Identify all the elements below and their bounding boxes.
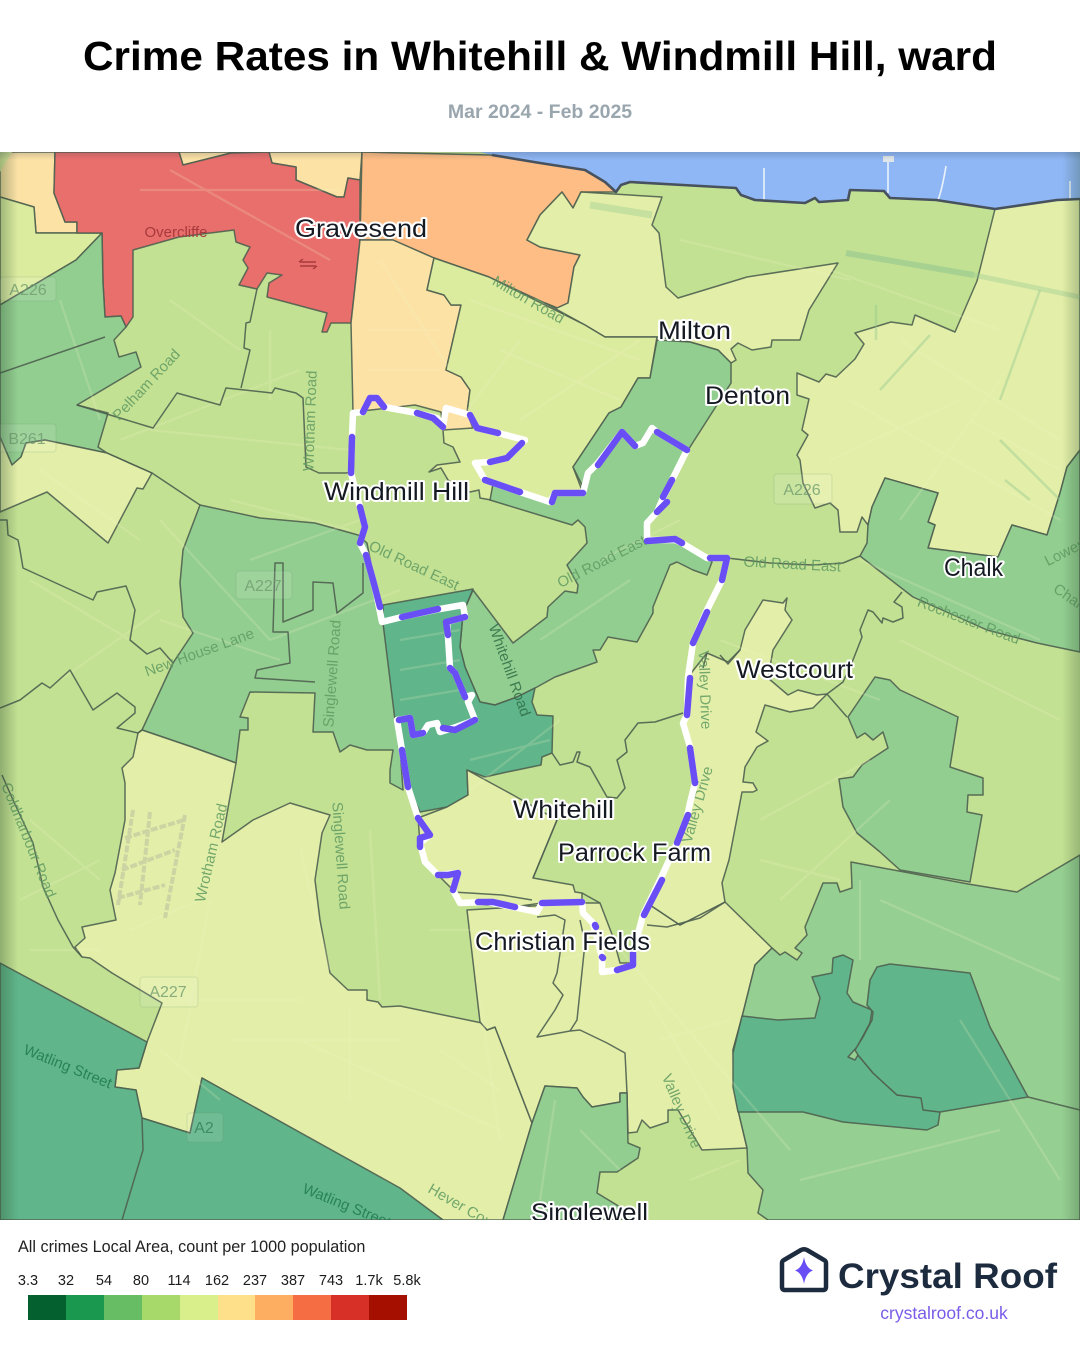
place labels: Singlewell	[531, 1199, 648, 1227]
place labels: Westcourt	[736, 656, 853, 684]
railway and creeks	[590, 205, 1080, 500]
area: west light	[0, 437, 152, 543]
legend tick labels: 32	[58, 1273, 74, 1289]
map base	[0, 152, 1080, 1220]
road labels: Old Road East	[743, 553, 842, 576]
road badges: A226	[783, 482, 821, 499]
road labels: Pelham Road	[109, 346, 184, 424]
water: Thames	[480, 152, 1080, 209]
area: Westcourt light	[650, 598, 827, 925]
legend tick labels: 743	[319, 1273, 343, 1289]
road badges: A227	[149, 984, 187, 1001]
area: south-west light	[75, 730, 532, 1220]
road badges: A227	[244, 578, 282, 595]
logo: Crystal Roof	[780, 1247, 1058, 1323]
legend tick labels: 387	[281, 1273, 305, 1289]
place labels: Christian Fields	[475, 928, 650, 956]
legend tick labels: 114	[167, 1273, 191, 1289]
legend colour scale	[28, 1295, 407, 1320]
area: Old Road East medium green	[460, 340, 731, 705]
legend title: All crimes Local Area, count per 1000 population	[18, 1238, 365, 1256]
choropleth map	[0, 152, 1080, 1220]
coastline	[492, 155, 1080, 209]
road labels: Singlewell Road	[320, 619, 345, 728]
area: corner	[0, 152, 12, 172]
place labels: Windmill Hill	[324, 478, 469, 506]
legend tick labels: 80	[133, 1273, 149, 1289]
road labels: Hever Court	[425, 1181, 504, 1236]
ward boundary: white line	[351, 398, 727, 972]
area: Singlewell medium green	[503, 1086, 640, 1220]
area: south-east medium green	[733, 855, 1080, 1220]
road labels: New House Lane	[142, 625, 256, 680]
road badges: B261	[8, 431, 46, 448]
road labels: Old Road East	[366, 538, 462, 595]
area: Whitehill light	[418, 770, 582, 907]
area: east light	[797, 199, 1080, 557]
road badges: A2	[194, 1120, 214, 1137]
road badges	[0, 277, 832, 1142]
legend tick labels	[18, 1273, 421, 1289]
place labels: Parrock Farm	[558, 839, 711, 867]
area: Overcliffe red	[54, 152, 360, 332]
area: far left light	[0, 197, 102, 305]
road labels: Watling Street	[300, 1180, 394, 1232]
area: south-east dark green west	[733, 955, 940, 1130]
area: south of Milton Road light	[427, 258, 657, 502]
map edge shading	[0, 152, 1080, 1220]
boats and piers	[764, 156, 1070, 200]
road labels: Valley Drive	[695, 650, 714, 730]
map: street texture	[20, 170, 1060, 1200]
area: town orange	[360, 152, 616, 308]
area: Rochester medium green	[839, 677, 983, 882]
housing estate pattern	[118, 810, 185, 918]
road labels: Valley Drive	[658, 1072, 704, 1151]
title: Crime Rates in Whitehill & Windmill Hill, ward	[83, 33, 997, 79]
road labels: Valley Drive	[679, 764, 717, 845]
area: top pale notches	[179, 152, 362, 197]
area: top-left pale	[0, 152, 77, 233]
subtitle: date range: Mar 2024 - Feb 2025	[448, 101, 632, 123]
legend	[18, 1238, 421, 1320]
icon: house with star	[780, 1247, 828, 1292]
logo wordmark: Crystal Roof	[838, 1257, 1057, 1296]
place labels	[295, 215, 1003, 1227]
area: New House Lane medium green	[142, 505, 403, 790]
road labels: Overcliffe	[144, 224, 208, 241]
place labels: Gravesend	[295, 215, 427, 243]
area: south-east dark green east	[855, 964, 1028, 1112]
area: Milton light	[527, 192, 838, 363]
area: pale orange	[351, 240, 473, 431]
legend tick labels: 237	[243, 1273, 267, 1289]
road labels: Wrotham Road	[300, 370, 321, 471]
road labels: Wrotham Road	[192, 802, 231, 904]
legend tick labels: 1.7k	[355, 1273, 383, 1289]
road labels: Rochester Road	[915, 593, 1022, 648]
place labels: Whitehill	[513, 796, 614, 824]
area: Watling Street dark green	[0, 963, 443, 1220]
road badges: A226	[9, 282, 47, 299]
road labels: Singlewell Road	[328, 801, 353, 910]
area: Chalk medium green	[860, 450, 1080, 652]
road labels	[0, 224, 1080, 1236]
area: ward core dark green	[383, 589, 553, 812]
road labels: Milton Road	[489, 273, 567, 327]
legend tick labels: 162	[205, 1273, 229, 1289]
road labels: Watling Street	[21, 1041, 115, 1093]
area: Christian Fields light	[467, 902, 772, 1150]
road labels: Old Road East	[555, 532, 650, 592]
legend tick labels: 3.3	[18, 1273, 38, 1289]
place labels: Denton	[705, 382, 790, 410]
ward boundary: purple dashes	[351, 398, 727, 970]
website url: crystalroof.co.uk	[880, 1303, 1008, 1323]
icon: rail station	[299, 259, 317, 269]
place labels: Milton	[658, 317, 731, 345]
road labels: Whitehill Road	[485, 622, 534, 719]
extra borders	[0, 289, 1080, 1220]
legend tick labels: 54	[96, 1273, 112, 1289]
legend tick labels: 5.8k	[393, 1273, 421, 1289]
area: A226 and B261 dark green	[0, 233, 141, 465]
place labels: Chalk	[944, 554, 1003, 582]
